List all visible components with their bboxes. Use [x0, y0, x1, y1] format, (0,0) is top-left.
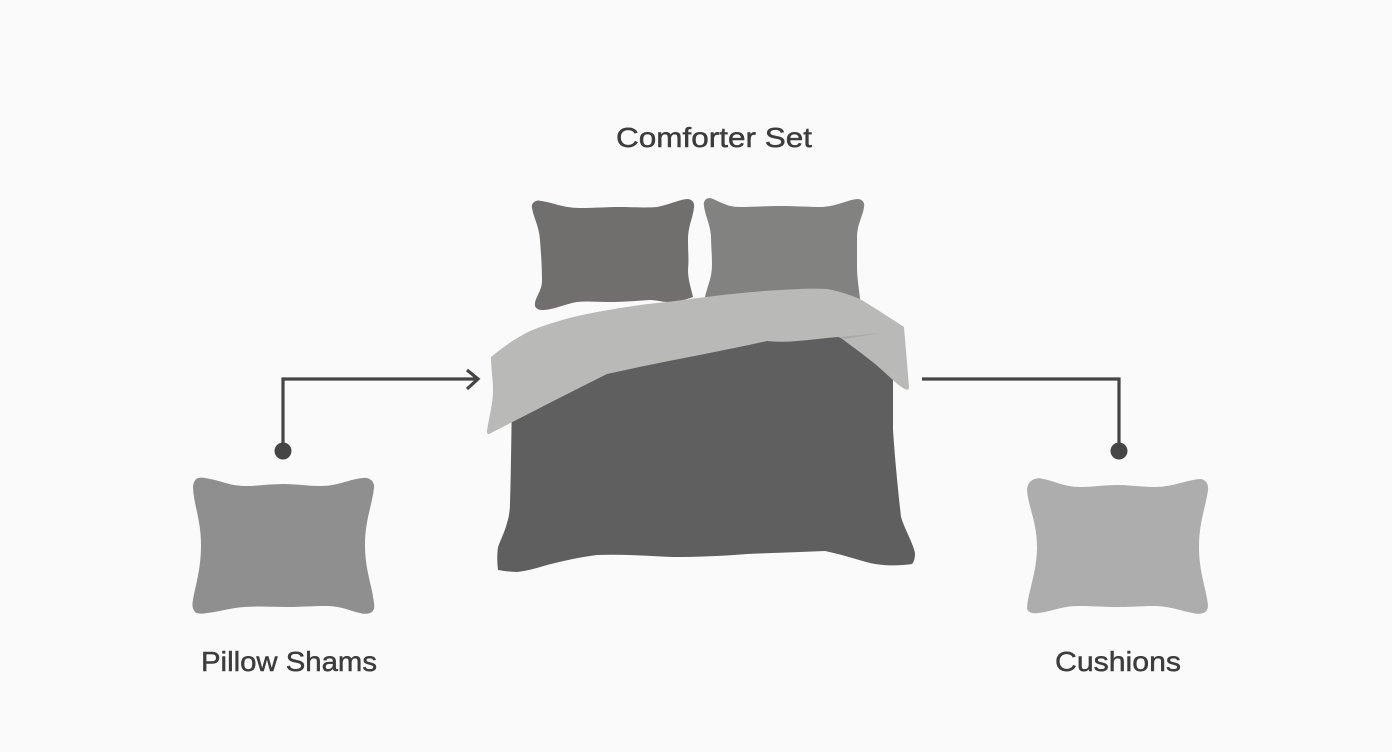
- icon: folded duvet top: [487, 289, 909, 434]
- label: Pillow Shams: Pillow Shams: [201, 646, 377, 677]
- label: Cushions: Cushions: [1055, 646, 1181, 677]
- icon: duvet fold crease: [841, 333, 880, 339]
- icon: cushion: [1027, 478, 1208, 614]
- title: Comforter Set: Comforter Set: [616, 122, 812, 153]
- icon: left bed pillow: [532, 199, 694, 310]
- icon: duvet body: [497, 320, 915, 572]
- connector: bed to cushions: [922, 379, 1128, 460]
- arrow: pillow shams to bed: [274, 370, 478, 460]
- icon: pillow sham: [192, 478, 374, 614]
- icon: right bed pillow: [704, 198, 864, 299]
